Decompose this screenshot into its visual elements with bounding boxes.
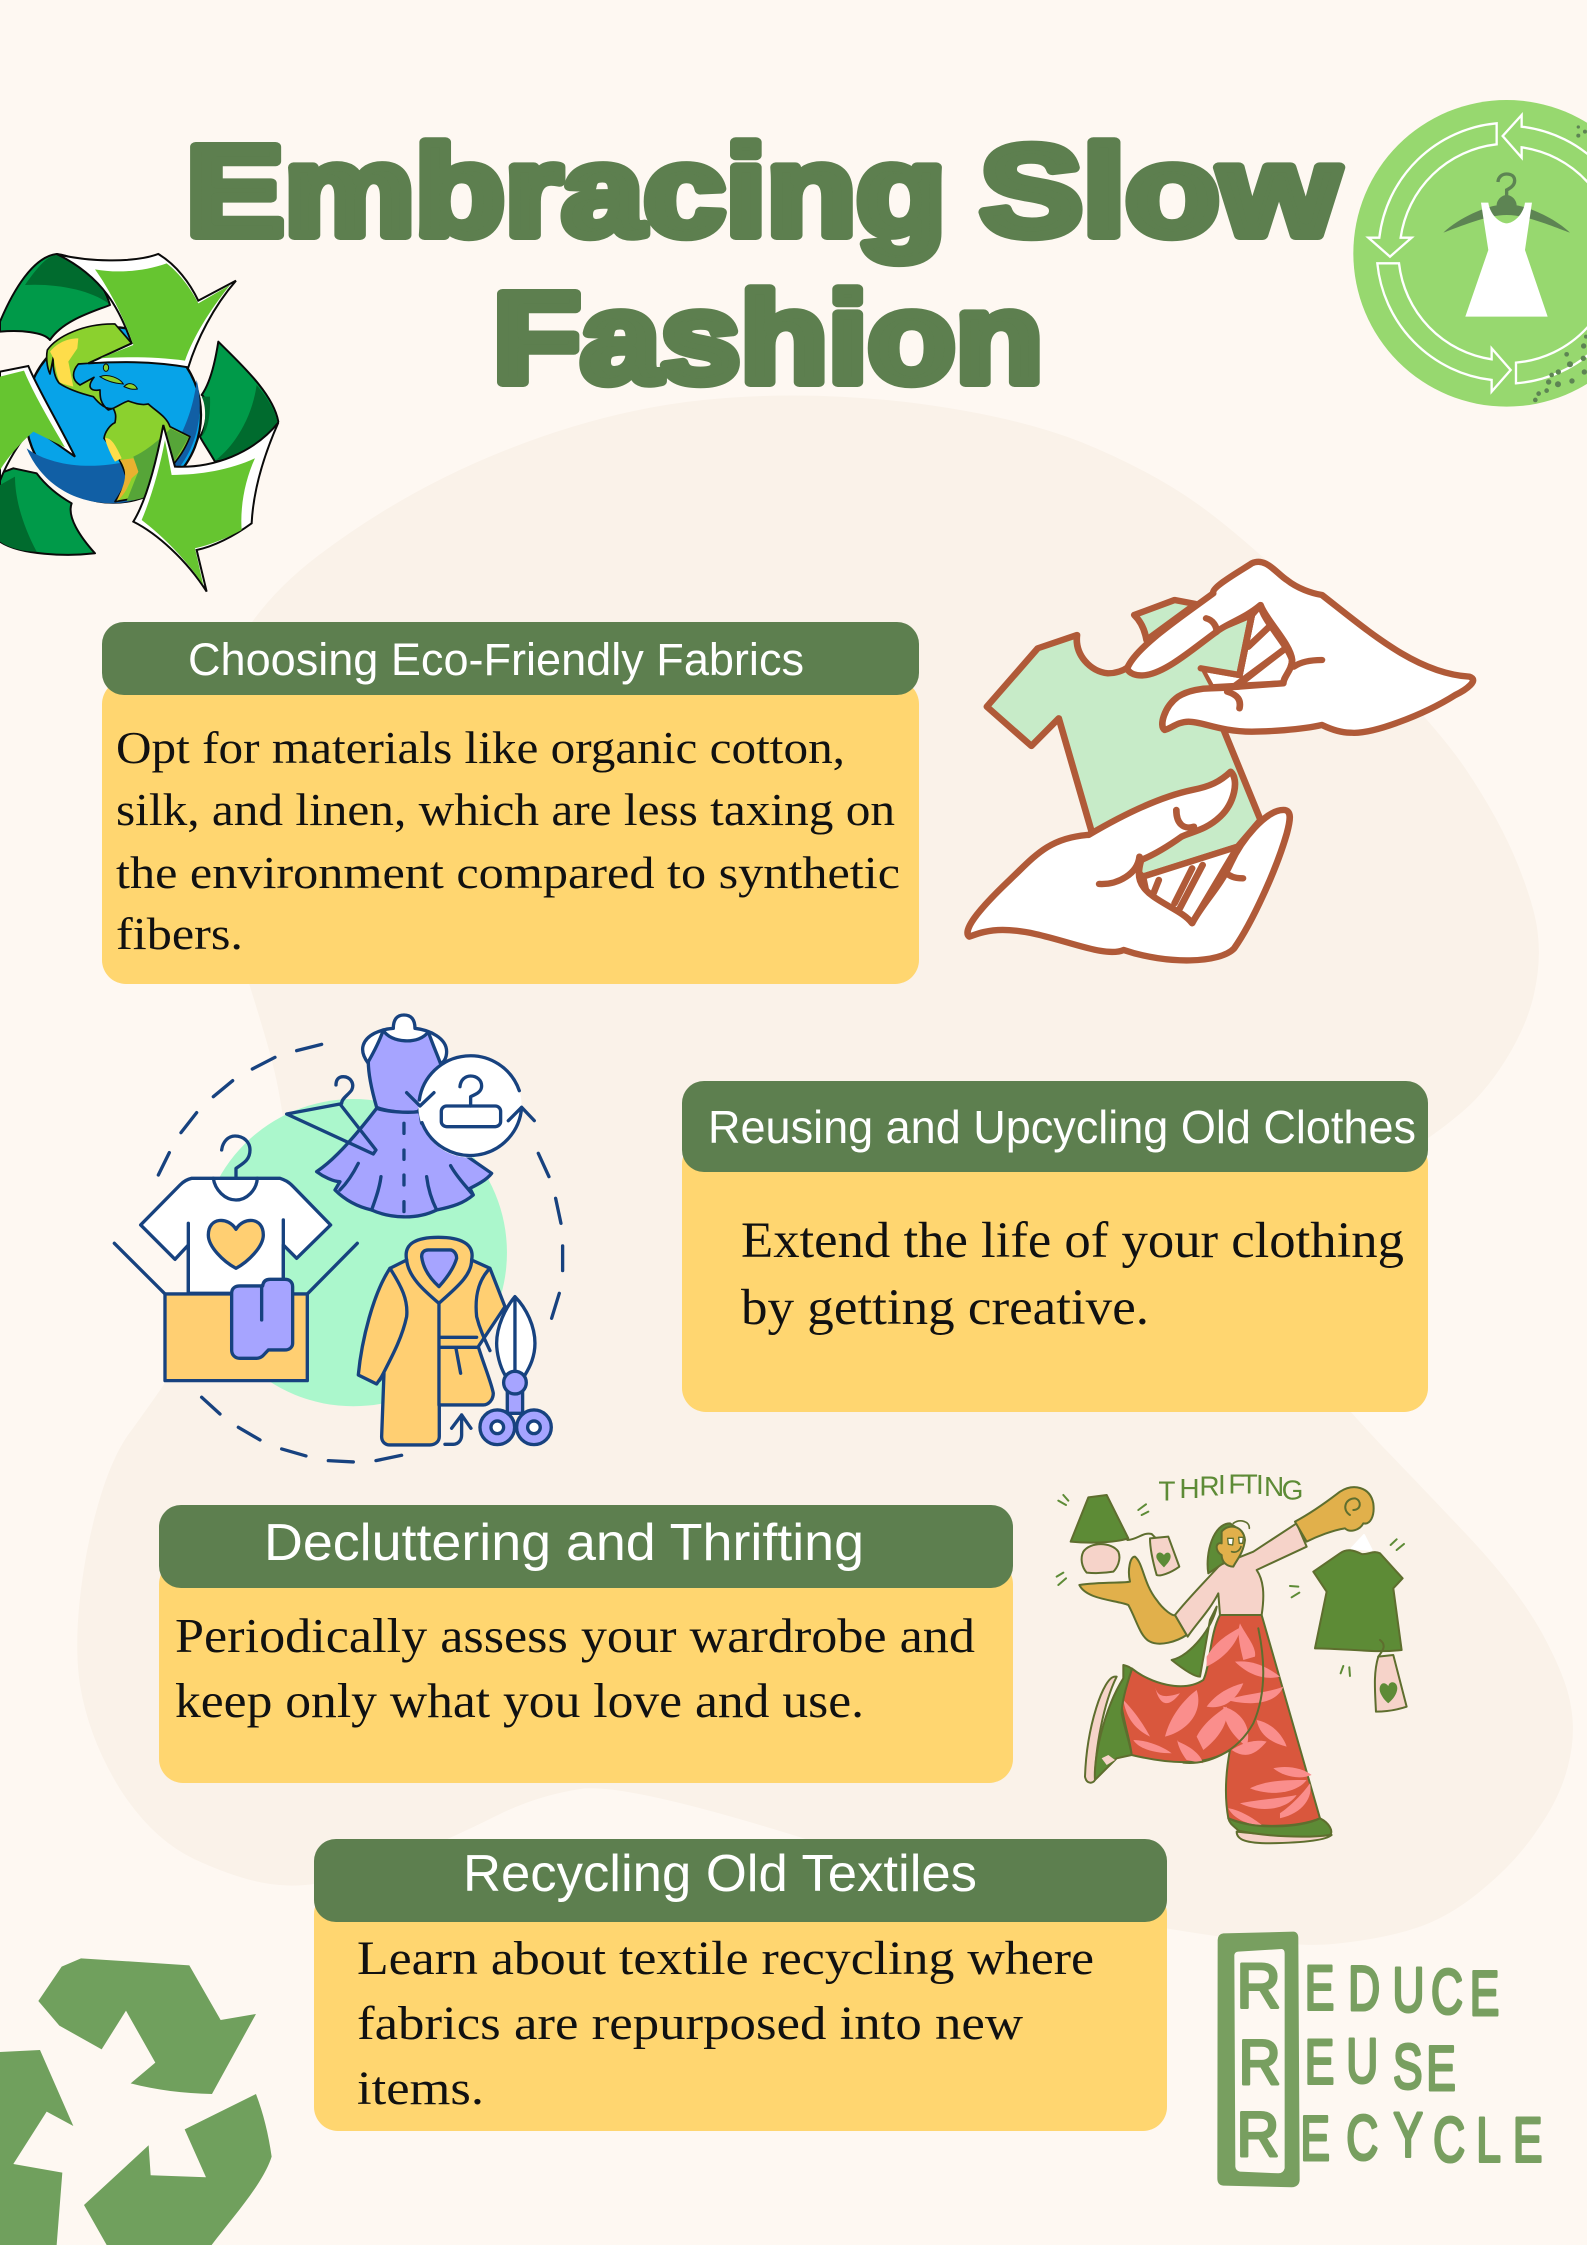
recycling arrows: [0, 254, 278, 592]
title: [186, 120, 1340, 410]
dress: [1465, 203, 1548, 317]
title: Slow: [980, 120, 1340, 263]
heading: choosing eco-friendly fabrics: Choosing Eco-Friendly Fabrics: [188, 634, 804, 685]
label: thrifting: THRIFTING: [1158, 1468, 1303, 1507]
globe: [26, 324, 201, 503]
icon: hands holding a green t-shirt: [967, 562, 1473, 960]
cardboard box: [114, 1243, 357, 1381]
text: decluttering description: Periodically assess your wardrobe and: [175, 1608, 975, 1663]
hanger: [1443, 174, 1570, 233]
reuse circle with hanger: [407, 1054, 534, 1158]
text: reusing description: [741, 1213, 1404, 1336]
heading: decluttering and thrifting: Decluttering and Thrifting: [264, 1514, 864, 1572]
icon: reduce reuse recycle lettering: EDUCE: [1305, 1953, 1499, 2029]
text: recycling description: [357, 1932, 1094, 2115]
icon: reduce reuse recycle lettering: R: [1237, 2100, 1279, 2170]
hair back: [1172, 1607, 1217, 1677]
text: choosing fabrics description: fibers.: [116, 908, 243, 959]
scissors: [480, 1297, 551, 1445]
icon: reduce reuse recycle lettering: EUSE: [1305, 2026, 1456, 2104]
pink top: [1175, 1523, 1307, 1637]
right shoe: [1228, 1818, 1332, 1843]
text: recycling description: Learn about textile recycling where: [357, 1932, 1094, 1985]
text: reusing description: Extend the life of your clothing: [741, 1213, 1404, 1269]
text: choosing fabrics description: the environment compared to synthetic: [116, 847, 900, 898]
icon: reduce reuse recycle lettering: R: [1239, 2028, 1281, 2098]
head and hair: [1208, 1521, 1249, 1573]
left shoe: [1085, 1665, 1132, 1783]
icon: upcycling clothes illustration: [114, 1015, 563, 1462]
icon: reduce reuse recycle lettering: ECYCLE: [1300, 2100, 1542, 2176]
green tee on hanger with tag: [1313, 1535, 1407, 1712]
heading: choosing eco-friendly fabrics: [102, 622, 919, 695]
text: recycling description: fabrics are repurposed into new: [357, 1997, 1023, 2050]
panel: choosing eco-friendly fabrics: [102, 622, 919, 984]
t-shirt with heart: [141, 1136, 331, 1293]
text: choosing fabrics description: Opt for materials like organic cotton,: [116, 722, 845, 773]
right arm holding tee: [1295, 1487, 1374, 1542]
heading: recycling old textiles: [314, 1839, 1167, 1922]
icon: globe with recycling arrows: [0, 254, 278, 592]
title: Fashion: [493, 267, 1043, 410]
icon: reduce reuse recycle lettering: R: [1237, 1951, 1281, 2021]
panel: recycling old textiles: [314, 1839, 1167, 2131]
lamp and tag: [1071, 1495, 1179, 1575]
title: Embracing: [186, 120, 946, 263]
heading: reusing and upcycling: [682, 1081, 1428, 1172]
heading: recycling old textiles: Recycling Old Textiles: [463, 1845, 977, 1903]
text: recycling description: items.: [357, 2062, 484, 2115]
text: decluttering description: [175, 1608, 975, 1728]
heading: decluttering and thrifting: [159, 1505, 1013, 1588]
icon: reduce reuse recycle lettering: [1217, 1932, 1542, 2187]
icon: woman thrifting illustration: [1057, 1468, 1407, 1843]
icon: green recycling symbol: [0, 1958, 272, 2245]
wide red trousers: [1122, 1615, 1320, 1826]
hanger: [287, 1077, 376, 1154]
dress on mannequin: [317, 1015, 492, 1217]
text: choosing fabrics description: [116, 722, 900, 959]
heading: reusing and upcycling: Reusing and Upcycling Old Clothes: [708, 1101, 1416, 1153]
text: choosing fabrics description: silk, and linen, which are less taxing on: [116, 784, 895, 835]
text: decluttering description: keep only what you love and use.: [175, 1673, 864, 1728]
icon: green circle with recycling arrows and dress: [1353, 100, 1587, 407]
panel: reusing and upcycling old clothes: [682, 1081, 1428, 1412]
text: reusing description: by getting creative.: [741, 1280, 1149, 1336]
left arm with gold hand: [1079, 1557, 1187, 1644]
coat: [358, 1237, 505, 1445]
panel: decluttering and thrifting: [159, 1505, 1013, 1783]
